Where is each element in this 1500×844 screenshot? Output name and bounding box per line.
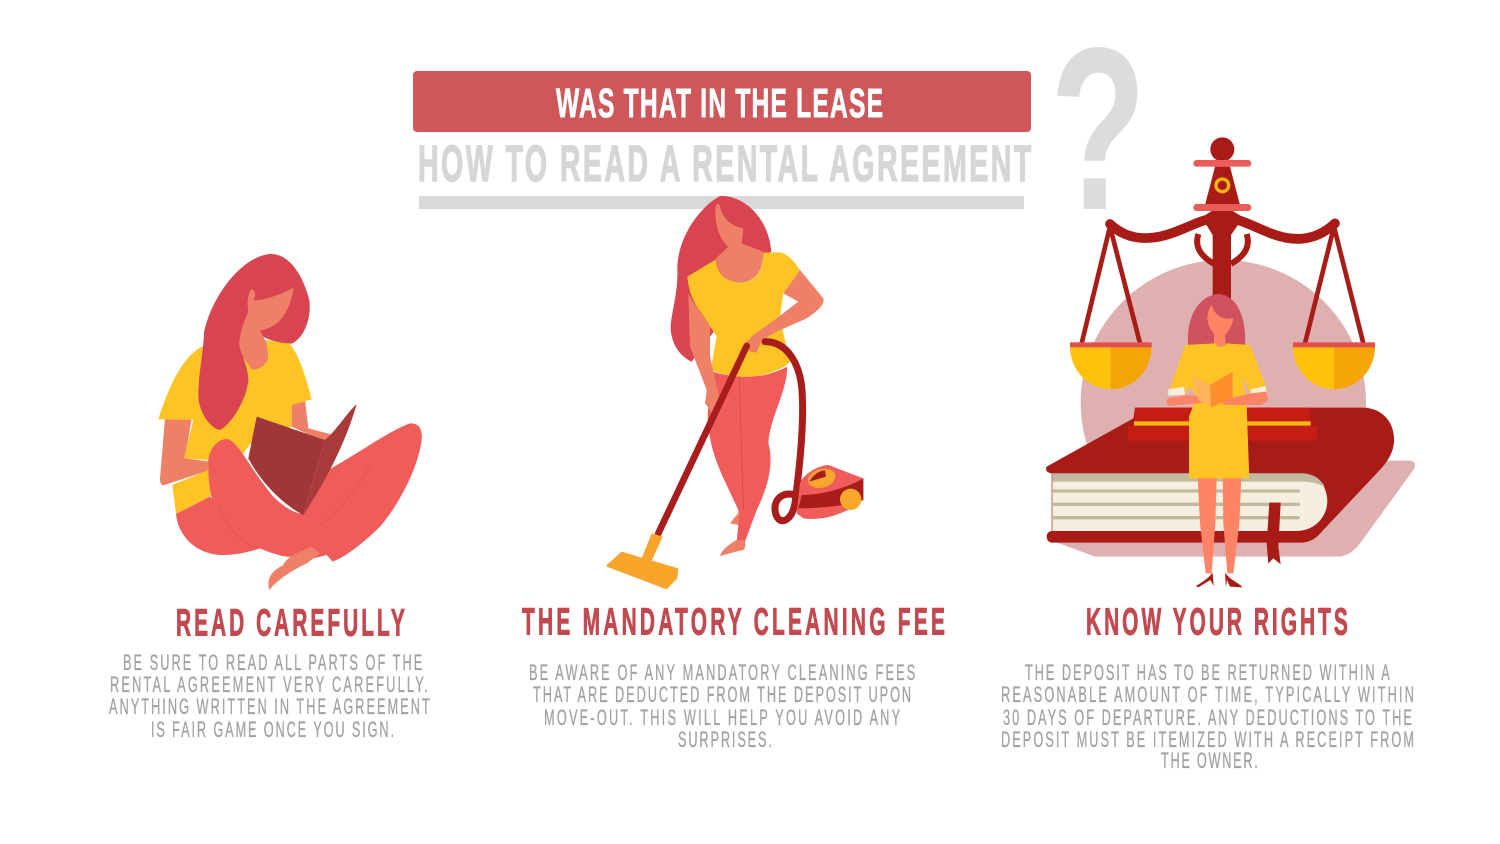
vacuum hose and wand — [658, 342, 803, 533]
text block: read carefully: ANYTHING WRITTEN IN THE AGREEMENT — [109, 694, 430, 719]
subtitle: HOW TO READ A RENTAL AGREEMENT — [418, 135, 1031, 192]
text block: read carefully: BE SURE TO READ ALL PARTS OF THE — [123, 650, 422, 675]
icon: question mark: ? — [1050, 0, 1146, 259]
title banner — [413, 71, 1031, 132]
title banner: WAS THAT IN THE LEASE — [556, 81, 883, 127]
text block: know your rights — [1001, 660, 1414, 773]
text block: mandatory cleaning fee: SURPRISES. — [678, 727, 772, 752]
heading: know your rights: KNOW YOUR RIGHTS — [1086, 601, 1348, 643]
text block: know your rights: DEPOSIT MUST BE ITEMIZED WITH A RECEIPT FROM — [1001, 727, 1414, 752]
woman in yellow dress — [1167, 294, 1269, 587]
text block: read carefully — [109, 650, 430, 742]
text block: read carefully: RENTAL AGREEMENT VERY CAREFULLY. — [110, 672, 428, 697]
book shadow — [1050, 461, 1415, 557]
text block: mandatory cleaning fee — [529, 660, 915, 752]
illustration: woman reading — [158, 254, 422, 590]
illustration: scales of justice, law book and woman — [1046, 137, 1415, 587]
text block: know your rights: REASONABLE AMOUNT OF TIME, TYPICALLY WITHIN — [1001, 682, 1414, 707]
heading: read carefully: READ CAREFULLY — [176, 602, 405, 644]
vacuum body — [797, 465, 863, 519]
illustration: woman vacuuming — [607, 196, 863, 589]
subtitle underline bar — [419, 196, 1024, 209]
text block: mandatory cleaning fee: BE AWARE OF ANY MANDATORY CLEANING FEES — [529, 660, 915, 685]
text block: know your rights: THE OWNER. — [1161, 748, 1258, 773]
text block: read carefully: IS FAIR GAME ONCE YOU SIGN. — [151, 717, 394, 742]
heading: mandatory cleaning fee: THE MANDATORY CLEANING FEE — [522, 601, 945, 643]
scales — [1070, 137, 1375, 389]
vacuum nozzle — [607, 533, 678, 589]
text block: know your rights: 30 DAYS OF DEPARTURE. ANY DEDUCTIONS TO THE — [1003, 705, 1412, 730]
pink background circle — [1081, 260, 1366, 545]
law book — [1046, 408, 1394, 564]
text block: know your rights: THE DEPOSIT HAS TO BE RETURNED WITHIN A — [1025, 660, 1390, 685]
text block: mandatory cleaning fee: THAT ARE DEDUCTED FROM THE DEPOSIT UPON — [533, 682, 911, 707]
text block: mandatory cleaning fee: MOVE-OUT. THIS WILL HELP YOU AVOID ANY — [544, 705, 900, 730]
